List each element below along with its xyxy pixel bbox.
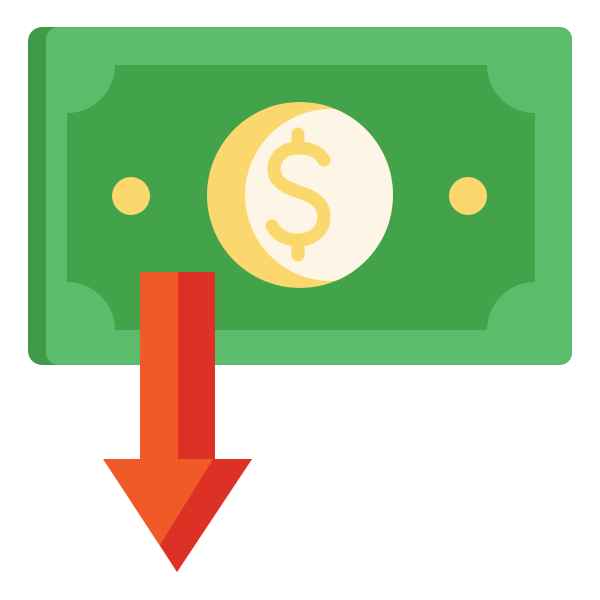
icon: right dot bbox=[449, 177, 487, 215]
icon: coin bbox=[207, 102, 393, 288]
icon: left dot bbox=[112, 177, 150, 215]
banknote bbox=[28, 27, 572, 365]
arrow: down bbox=[103, 272, 252, 572]
icon: dollar sign bbox=[272, 134, 324, 255]
